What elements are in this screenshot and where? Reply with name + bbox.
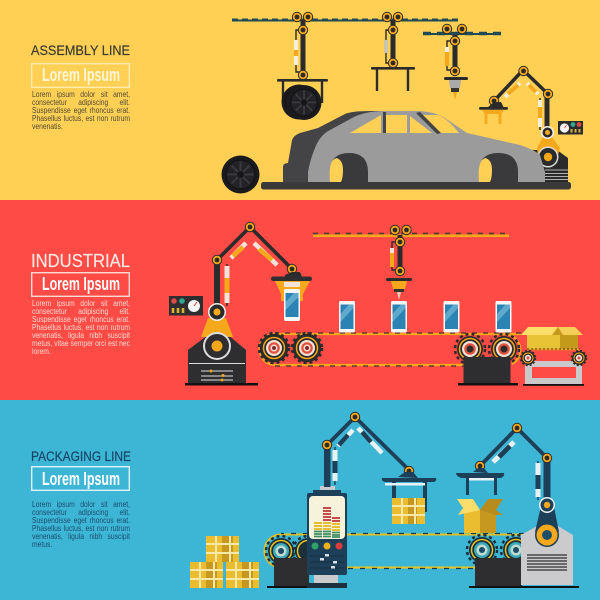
text block: industrial description: Suspendisse eget rhoncus erat. — [32, 315, 130, 324]
small conveyor — [520, 349, 586, 386]
text block: assembly description: Lorem ipsum dolor sit amet, — [32, 90, 130, 99]
button: lorem ipsum — [32, 467, 129, 490]
text block: industrial description — [32, 299, 130, 356]
text block: assembly description — [32, 90, 130, 131]
text block: packaging description — [32, 500, 130, 549]
conveyor belt — [260, 333, 521, 366]
robot arm holding wheel — [277, 12, 328, 120]
robot arm with phone — [185, 222, 312, 386]
text block: assembly description: venenatis. — [32, 122, 62, 131]
second robot arm with open box — [456, 423, 559, 547]
button: lorem ipsum: Lorem Ipsum — [42, 274, 120, 294]
robot arm with empty gripper — [371, 12, 415, 91]
control panel — [558, 121, 583, 134]
heading: industrial: INDUSTRIAL — [31, 251, 130, 271]
stacked boxes — [190, 536, 259, 588]
text block: packaging description: Suspendisse eget rhoncus erat. — [32, 516, 130, 525]
heading: packaging line: PACKAGING LINE — [31, 448, 131, 464]
text block: industrial description: consectetur adipiscing elit. — [32, 307, 130, 316]
text block: industrial description: metus, vitae semper orci est nec — [32, 339, 130, 348]
text block: industrial description: lorem. — [32, 347, 50, 356]
robot base — [521, 520, 573, 585]
overhead rails — [232, 20, 501, 35]
conveyor belt — [264, 534, 524, 568]
robot arm with drill — [442, 24, 468, 100]
button: lorem ipsum: Lorem Ipsum — [42, 65, 120, 85]
text block: packaging description: metus. — [32, 540, 52, 549]
text block: packaging description: Lorem ipsum dolor sit amet, — [32, 500, 130, 509]
panel: industrial — [0, 200, 600, 400]
text block: assembly description: Suspendisse eget rhoncus erat. — [32, 106, 130, 115]
text block: assembly description: Phasellus luctus, est non rutrum — [32, 114, 130, 123]
text block: packaging description: venenatis, ligula nibh suscipit — [32, 532, 130, 541]
control tablet — [307, 490, 347, 588]
loose wheel — [222, 156, 260, 194]
robot arm beside the car — [479, 66, 568, 182]
cardboard box — [521, 327, 583, 349]
text block: industrial description: Lorem ipsum dolor sit amet, — [32, 299, 130, 308]
smartphones — [339, 301, 512, 332]
text block: packaging description: consectetur adipiscing elit. — [32, 508, 130, 517]
heading: assembly line: ASSEMBLY LINE — [31, 42, 130, 58]
panel: assembly line — [0, 0, 600, 200]
text block: assembly description: consectetur adipiscing elit. — [32, 98, 130, 107]
conveyor stand — [458, 357, 518, 386]
control panel — [169, 296, 203, 316]
button: lorem ipsum — [32, 64, 129, 87]
text block: industrial description: venenatis, ligula nibh suscipit — [32, 331, 130, 340]
equalizer chart — [314, 508, 340, 537]
text block: industrial description: Phasellus luctus, est non rutrum — [32, 323, 130, 332]
drill robot arm — [386, 225, 412, 300]
left conveyor stand — [267, 558, 309, 588]
button: lorem ipsum — [32, 273, 129, 296]
conveyor gears — [259, 333, 519, 364]
overhead rail — [313, 234, 509, 237]
car floor platform — [261, 182, 571, 190]
first robot arm with box — [320, 412, 436, 524]
car body — [283, 111, 545, 182]
button: lorem ipsum: Lorem Ipsum — [42, 469, 120, 489]
panel: packaging line — [0, 400, 600, 600]
conveyor gears — [266, 535, 531, 566]
text block: packaging description: Phasellus luctus, est non rutrum — [32, 524, 130, 533]
right conveyor stand — [469, 558, 579, 588]
